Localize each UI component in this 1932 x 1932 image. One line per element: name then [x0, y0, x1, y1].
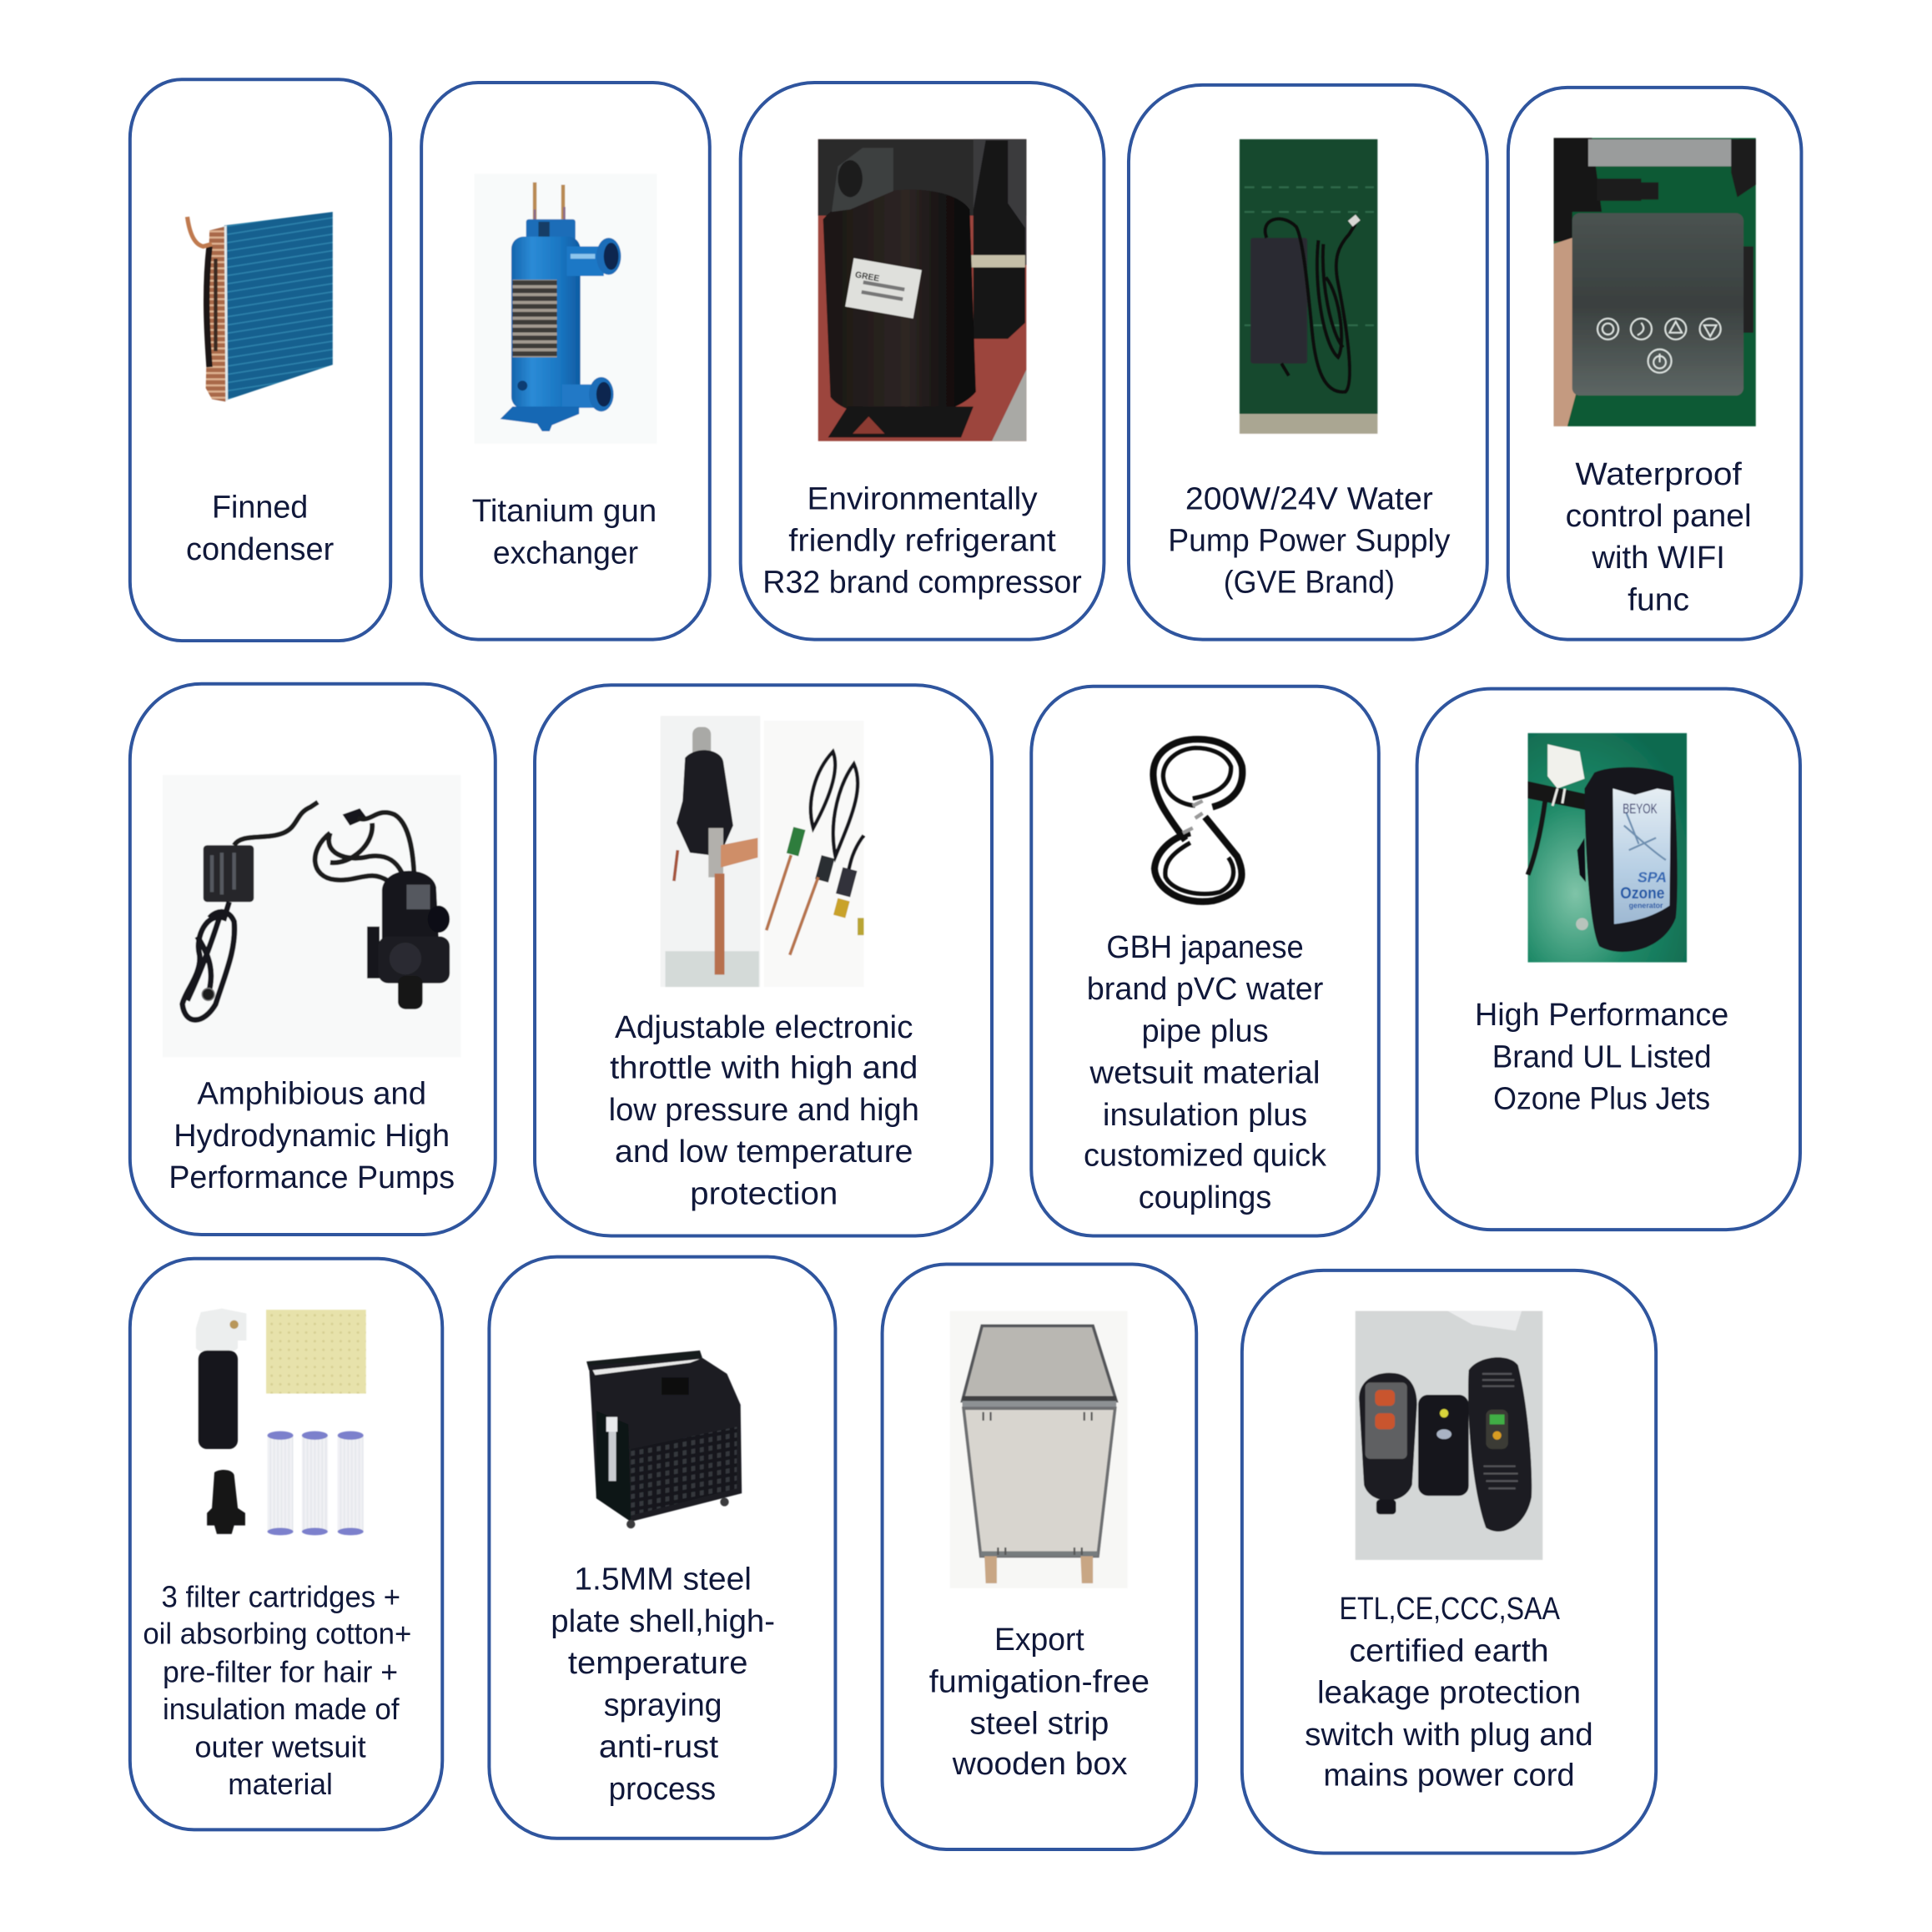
label: R32 compressor: R32 brand compressor	[762, 565, 1082, 601]
icon: black steel chiller	[586, 1351, 742, 1528]
label: steel shell: spraying	[604, 1687, 722, 1723]
label: steel shell: anti-rust	[599, 1729, 718, 1765]
label: wooden box: fumigation-free	[929, 1663, 1150, 1699]
icon: finned condenser	[188, 212, 333, 402]
card outline	[1417, 689, 1800, 1230]
panel: R32 compressor	[741, 83, 1104, 640]
card outline	[883, 1264, 1196, 1849]
label: electronic throttle: and low temperature	[615, 1134, 913, 1170]
label: waterproof control panel	[1566, 456, 1752, 617]
label: wooden box: wooden box	[952, 1746, 1127, 1782]
label: pumps	[169, 1076, 455, 1195]
card outline	[130, 684, 496, 1235]
panel: wooden box	[883, 1264, 1196, 1849]
label: water pump power supply	[1168, 480, 1451, 601]
icon: ozone generator photo: BEYOK	[1623, 802, 1658, 817]
label: ozone	[1475, 997, 1728, 1117]
label: wooden box: steel strip	[969, 1705, 1109, 1741]
icon: ozone generator photo: Ozone	[1620, 885, 1665, 903]
card outline	[1129, 85, 1487, 640]
icon: ozone generator photo: generator	[1629, 902, 1663, 910]
icon: coiled pipe	[1153, 739, 1242, 902]
label: earth leakage switch: leakage protection	[1317, 1675, 1581, 1711]
label: steel shell: plate shell,high-	[551, 1603, 775, 1639]
panel: titanium gun exchanger	[421, 83, 710, 640]
label: earth leakage switch: mains power cord	[1323, 1758, 1575, 1794]
panel: pumps	[130, 684, 496, 1235]
label: waterproof control panel: with WIFI	[1591, 540, 1725, 576]
icon: throttle valve photo	[661, 716, 863, 987]
label: PVC water pipe: GBH japanese	[1106, 929, 1304, 965]
label: wooden box: Export	[994, 1622, 1084, 1658]
label: earth leakage switch: switch with plug and	[1305, 1717, 1593, 1753]
label: steel shell: temperature	[568, 1645, 748, 1681]
label: ozone: Brand UL Listed	[1492, 1039, 1712, 1074]
card outline	[130, 1259, 442, 1829]
icon: titanium heat exchanger	[475, 174, 657, 444]
label: titanium gun exchanger	[472, 493, 657, 571]
icon: compressor photo	[818, 139, 1026, 441]
label: filter kit: oil absorbing cotton+	[143, 1617, 411, 1651]
panel: steel shell	[489, 1257, 835, 1839]
label: pumps: Hydrodynamic High	[174, 1118, 450, 1154]
label: PVC water pipe: customized quick	[1084, 1138, 1327, 1174]
label: ozone: High Performance	[1475, 997, 1728, 1033]
panel: finned condenser	[130, 79, 390, 641]
label: ozone: Ozone Plus Jets	[1493, 1081, 1710, 1117]
label: steel shell	[551, 1562, 775, 1807]
label: PVC water pipe: couplings	[1139, 1180, 1271, 1215]
panel: filter kit	[130, 1259, 442, 1829]
label: titanium gun exchanger: exchanger	[493, 535, 638, 571]
panel: PVC water pipe	[1031, 687, 1379, 1235]
label: R32 compressor	[762, 480, 1082, 601]
card outline	[535, 685, 992, 1235]
label: pumps: Performance Pumps	[169, 1160, 455, 1195]
icon: power supply photo	[1240, 139, 1377, 434]
label: waterproof control panel: control panel	[1566, 498, 1752, 534]
icon: amphibious pump photo	[163, 775, 460, 1057]
panel: water pump power supply	[1129, 85, 1487, 640]
card outline	[489, 1257, 835, 1839]
card outline	[741, 83, 1104, 640]
icon: control panel photo	[1554, 138, 1756, 426]
label: water pump power supply: (GVE Brand)	[1224, 565, 1395, 601]
icon: steel strip wooden box	[950, 1311, 1127, 1588]
label: finned condenser: Finned	[212, 490, 308, 526]
label: electronic throttle	[609, 1009, 919, 1211]
label: filter kit: insulation made of	[163, 1692, 400, 1726]
label: waterproof control panel: func	[1628, 581, 1689, 617]
label: finned condenser: condenser	[186, 531, 334, 567]
label: electronic throttle: Adjustable electronic	[615, 1009, 913, 1045]
label: R32 compressor: Environmentally	[807, 480, 1038, 516]
label: electronic throttle: throttle with high and	[610, 1050, 918, 1086]
card outline	[130, 79, 390, 641]
panel: electronic throttle	[535, 685, 992, 1235]
label: water pump power supply: Pump Power Supply	[1168, 523, 1451, 559]
icon: filter kit	[196, 1309, 366, 1535]
label: PVC water pipe	[1084, 929, 1327, 1215]
label: filter kit	[143, 1579, 411, 1801]
label: PVC water pipe: wetsuit material	[1089, 1055, 1321, 1091]
card outline	[1242, 1270, 1656, 1853]
label: waterproof control panel: Waterproof	[1575, 456, 1742, 492]
icon: ozone generator photo: SPA	[1638, 869, 1667, 886]
label: filter kit: outer wetsuit	[194, 1730, 366, 1764]
card outline	[1031, 687, 1379, 1235]
label: finned condenser	[186, 490, 334, 567]
label: PVC water pipe: pipe plus	[1141, 1013, 1269, 1049]
label: electronic throttle: protection	[690, 1175, 838, 1211]
card outline	[421, 83, 710, 640]
label: earth leakage switch: certified earth	[1349, 1633, 1549, 1668]
card outline	[1508, 88, 1801, 640]
label: earth leakage switch	[1305, 1591, 1593, 1794]
label: filter kit: 3 filter cartridges +	[161, 1579, 400, 1613]
label: pumps: Amphibious and	[197, 1076, 426, 1112]
label: wooden box	[929, 1622, 1150, 1782]
panel: earth leakage switch	[1242, 1270, 1656, 1853]
label: electronic throttle: low pressure and high	[609, 1092, 919, 1128]
label: titanium gun exchanger: Titanium gun	[472, 493, 657, 529]
label: PVC water pipe: insulation plus	[1103, 1097, 1307, 1133]
icon: compressor photo: GREE	[854, 270, 880, 284]
icon: ozone generator photo	[1528, 733, 1687, 963]
label: PVC water pipe: brand pVC water	[1087, 971, 1324, 1007]
label: filter kit: material	[228, 1767, 333, 1801]
label: steel shell: process	[609, 1771, 716, 1807]
label: earth leakage switch: ETL,CE,CCC,SAA	[1340, 1591, 1560, 1627]
panel: waterproof control panel	[1508, 88, 1801, 640]
label: water pump power supply: 200W/24V Water	[1185, 480, 1433, 516]
label: steel shell: 1.5MM steel	[574, 1562, 752, 1597]
icon: leakage protection plugs	[1356, 1311, 1542, 1560]
label: filter kit: pre-filter for hair +	[163, 1654, 398, 1688]
label: R32 compressor: friendly refrigerant	[788, 523, 1056, 559]
panel: ozone	[1417, 689, 1800, 1230]
